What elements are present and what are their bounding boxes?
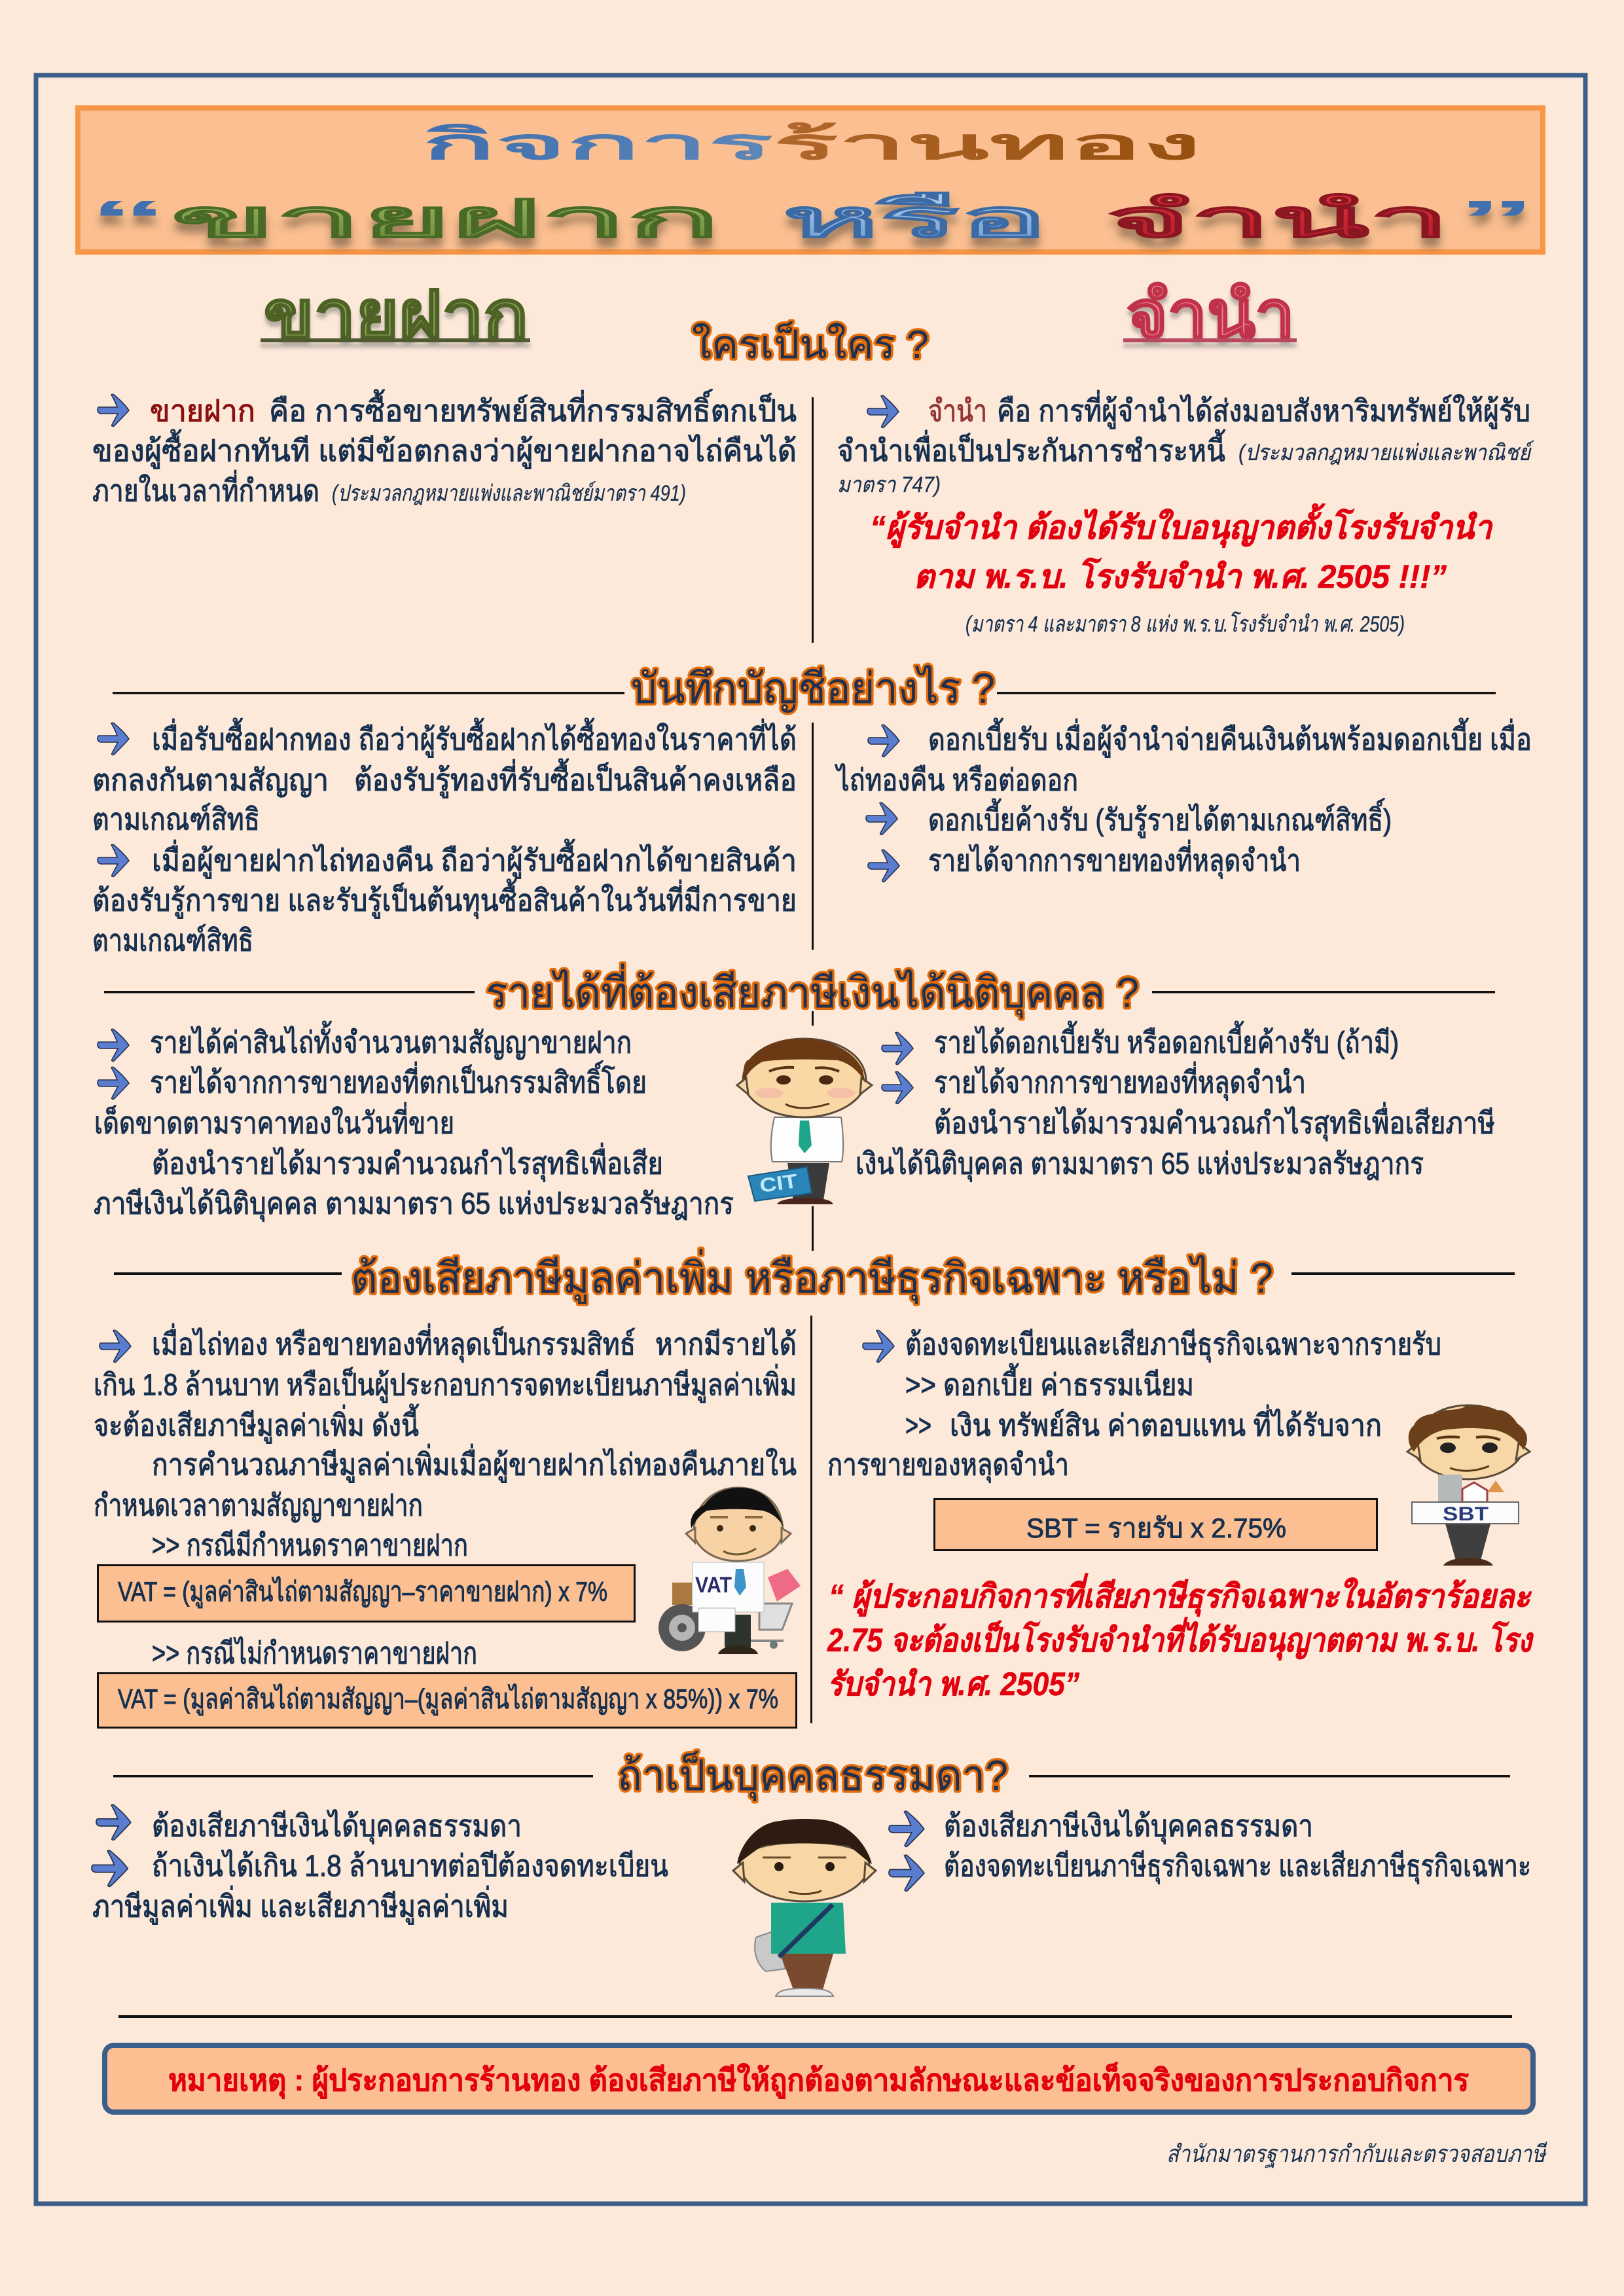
credit line: สำนักมาตรฐานการกำกับและตรวจสอบภาษี xyxy=(1166,2140,1547,2168)
definition text: (ประมวลกฎหมายแพ่งและพาณิชย์ xyxy=(1238,440,1534,465)
icon: CIT businessman xyxy=(737,1039,872,1204)
formula box: VAT with set price: VAT = (มูลค่าสินไถ่ตามสัญญา–ราคาขายฝาก) x 7% xyxy=(118,1576,607,1608)
VAT explanation text: หากมีรายได้ xyxy=(655,1327,797,1361)
taxable income text: ต้องนำรายได้มารวมคำนวณกำไรสุทธิเพื่อเสีย xyxy=(152,1143,663,1182)
icon: arrow xyxy=(882,1032,913,1064)
individual text: ภาษีมูลค่าเพิ่ม และเสียภาษีมูลค่าเพิ่ม xyxy=(92,1885,509,1924)
definition text xyxy=(92,389,797,508)
VAT explanation text: จะต้องเสียภาษีมูลค่าเพิ่ม ดังนี้ xyxy=(94,1403,419,1444)
icon: arrow xyxy=(868,725,899,757)
taxable income text: ภาษีเงินได้นิติบุคคล ตามมาตรา 65 แห่งประมวลรัษฎากร xyxy=(94,1186,734,1223)
VAT explanation text: เกิน 1.8 ล้านบาท หรือเป็นผู้ประกอบการจดทะเบียนภาษีมูลค่าเพิ่ม xyxy=(94,1364,797,1403)
icon: arrow xyxy=(96,1804,131,1840)
heading: จำนำ: จำนำ xyxy=(1127,278,1295,351)
panel: accounting for จำนำ xyxy=(835,717,1532,882)
panel: SBT xyxy=(827,1327,1534,1702)
icon: arrow xyxy=(866,802,897,834)
individual text: ต้องเสียภาษีเงินได้บุคคลธรรมดา xyxy=(152,1809,522,1844)
SBT explanation text: การขายของหลุดจำนำ xyxy=(827,1448,1069,1483)
accounting text: ดอกเบี้ยค้างรับ (รับรู้รายได้ตามเกณฑ์สิทธิ์) xyxy=(928,798,1392,838)
SBT explanation text: ต้องจดทะเบียนและเสียภาษีธุรกิจเฉพาะจากรายรับ xyxy=(905,1327,1441,1363)
SBT explanation text: >> ดอกเบี้ย ค่าธรรมเนียม xyxy=(905,1363,1194,1402)
section heading: VAT or SBT: ต้องเสียภาษีมูลค่าเพิ่ม หรือภาษีธุรกิจเฉพาะ หรือไม่ ? xyxy=(351,1249,1273,1304)
panel: accounting for ขายฝาก xyxy=(92,717,797,957)
definition text: ขายฝาก xyxy=(150,394,255,428)
panel: definition of จำนำ xyxy=(837,390,1534,637)
callout: SBT rate requirement xyxy=(827,1573,1534,1702)
formula box: VAT with set price xyxy=(98,1566,635,1622)
definition text: จำนำ xyxy=(928,394,987,428)
icon: arrow xyxy=(863,1330,894,1362)
individual text xyxy=(92,1809,668,1924)
accounting text: ไถ่ทองคืน หรือต่อดอก xyxy=(835,763,1078,797)
panel: individual ขายฝาก xyxy=(92,1804,668,1924)
accounting text: ต้องรับรู้การขาย และรับรู้เป็นต้นทุนซื้อสินค้าในวันที่มีการขาย xyxy=(92,878,797,919)
accounting text: เมื่อผู้ขายฝากไถ่ทองคืน ถือว่าผู้รับซื้อฝากได้ขายสินค้า xyxy=(152,839,797,878)
taxable income text xyxy=(856,1021,1495,1182)
icon: SBT businessman xyxy=(1407,1405,1530,1566)
SBT explanation text: เงิน ทรัพย์สิน ค่าตอบแทน ที่ได้รับจาก xyxy=(950,1405,1382,1443)
legal citation: (มาตรา 4 และมาตรา 8 แห่ง พ.ร.บ.โรงรับจำนำ พ.ศ. 2505) xyxy=(965,611,1405,637)
VAT explanation text xyxy=(94,1323,797,1562)
icon: arrow xyxy=(98,1029,129,1061)
accounting text: ตามเกณฑ์สิทธิ xyxy=(92,802,260,836)
title line 1: กิจการร้านทอง xyxy=(422,120,1201,168)
icon: VAT businessman xyxy=(659,1488,801,1654)
SBT explanation text: >> xyxy=(905,1408,931,1443)
icon: arrow xyxy=(98,844,129,876)
icon: arrow xyxy=(889,1855,924,1891)
accounting text: ตกลงกันตามสัญญา xyxy=(92,763,329,797)
individual text: ถ้าเงินได้เกิน 1.8 ล้านบาทต่อปีต้องจดทะเบียน xyxy=(152,1848,668,1882)
formula box: VAT without set price xyxy=(98,1673,796,1728)
callout: licence requirement xyxy=(870,503,1493,595)
definition text: คือ การซื้อขายทรัพย์สินที่กรรมสิทธิ์ตกเป็น xyxy=(269,389,797,428)
accounting text: ต้องรับรู้ทองที่รับซื้อเป็นสินค้าคงเหลือ xyxy=(354,758,797,798)
icon: arrow xyxy=(868,850,899,882)
definition text: (ประมวลกฎหมายแพ่งและพาณิชย์มาตรา 491) xyxy=(332,481,686,506)
callout: SBT rate requirement: 2.75 จะต้องเป็นโรงรับจำนำที่ได้รับอนุญาตตาม พ.ร.บ. โรง xyxy=(827,1617,1534,1660)
icon: arrow xyxy=(92,1850,128,1886)
taxable income text: เงินได้นิติบุคคล ตามมาตรา 65 แห่งประมวลรัษฎากร xyxy=(856,1147,1424,1182)
taxable income text: ต้องนำรายได้มารวมคำนวณกำไรสุทธิเพื่อเสียภาษี xyxy=(934,1102,1495,1141)
icon: arrow xyxy=(889,1811,924,1846)
case label: no set price: >> กรณีไม่กำหนดราคาขายฝาก xyxy=(152,1636,477,1670)
panel: definition of ขายฝาก xyxy=(92,389,797,508)
callout: SBT rate requirement: “ ผู้ประกอบกิจการที่เสียภาษีธุรกิจเฉพาะในอัตราร้อยละ xyxy=(829,1573,1532,1617)
sign label: SBT xyxy=(1443,1503,1489,1525)
title line 2: จำนำ xyxy=(1106,190,1450,248)
title line 2: ขายฝาก xyxy=(171,190,720,248)
title banner xyxy=(78,108,1543,252)
document label: VAT xyxy=(695,1573,732,1598)
definition text xyxy=(837,390,1534,497)
section heading: accounting: บันทึกบัญชีอย่างไร ? xyxy=(631,664,995,713)
callout: licence requirement: ตาม พ.ร.บ. โรงรับจำนำ พ.ศ. 2505 !!!” xyxy=(914,557,1447,595)
formula box: VAT without set price: VAT = (มูลค่าสินไถ่ตามสัญญา–(มูลค่าสินไถ่ตามสัญญา x 85%)) x 7% xyxy=(118,1683,778,1715)
icon: arrow xyxy=(867,395,899,427)
accounting text: รายได้จากการขายทองที่หลุดจำนำ xyxy=(928,839,1301,880)
icon: arrow xyxy=(98,394,129,426)
icon: individual person xyxy=(733,1819,876,1996)
taxable income text: เด็ดขาดตามราคาทองในวันที่ขาย xyxy=(94,1102,454,1140)
SBT explanation text xyxy=(827,1327,1441,1483)
panel: VAT xyxy=(94,1323,797,1728)
individual text xyxy=(944,1809,1531,1885)
accounting text: ดอกเบี้ยรับ เมื่อผู้จำนำจ่ายคืนเงินต้นพร้อมดอกเบี้ย เมื่อ xyxy=(928,717,1532,758)
note text: หมายเหตุ : ผู้ประกอบการร้านทอง ต้องเสียภาษีให้ถูกต้องตามลักษณะและข้อเท็จจริงของการประกอบกิจการ xyxy=(168,2062,1469,2099)
title line 2 xyxy=(89,190,1536,248)
title line 2: หรือ xyxy=(782,190,1048,248)
icon: arrow xyxy=(98,723,129,755)
definition text: ของผู้ซื้อฝากทันที แต่มีข้อตกลงว่าผู้ขายฝากอาจไถ่คืนได้ xyxy=(92,429,797,469)
definition text: จำนำเพื่อเป็นประกันการชำระหนี้ xyxy=(837,429,1225,467)
callout: SBT rate requirement: รับจำนำ พ.ศ. 2505” xyxy=(827,1666,1079,1702)
briefcase label: CIT xyxy=(758,1170,799,1197)
icon: arrow xyxy=(99,1330,131,1362)
definition text: มาตรา 747) xyxy=(837,473,941,497)
section heading: taxable income: รายได้ที่ต้องเสียภาษีเงินได้นิติบุคคล ? xyxy=(486,963,1139,1019)
panel: taxable income ขายฝาก xyxy=(94,1021,734,1223)
definition text: ภายในเวลาที่กำหนด xyxy=(92,470,319,508)
icon: arrow xyxy=(882,1071,913,1103)
accounting text: เมื่อรับซื้อฝากทอง ถือว่าผู้รับซื้อฝากได้ซื้อทองในราคาที่ได้ xyxy=(152,717,797,758)
VAT explanation text: การคำนวณภาษีมูลค่าเพิ่มเมื่อผู้ขายฝากไถ่ทองคืนภายใน xyxy=(152,1444,797,1483)
individual text: ต้องเสียภาษีเงินได้บุคคลธรรมดา xyxy=(944,1809,1313,1844)
section heading: individuals: ถ้าเป็นบุคคลธรรมดา? xyxy=(617,1751,1008,1802)
accounting text xyxy=(92,717,797,957)
accounting text: ตามเกณฑ์สิทธิ xyxy=(92,923,253,957)
title line 2: “ xyxy=(89,190,168,248)
accounting text xyxy=(835,717,1532,880)
taxable income text: รายได้ค่าสินไถ่ทั้งจำนวนตามสัญญาขายฝาก xyxy=(150,1021,632,1059)
taxable income text: รายได้ดอกเบี้ยรับ หรือดอกเบี้ยค้างรับ (ถ้ามี) xyxy=(934,1021,1399,1059)
taxable income text xyxy=(94,1021,734,1223)
panel: individual จำนำ xyxy=(889,1809,1531,1891)
definition text: คือ การที่ผู้จำนำได้ส่งมอบสังหาริมทรัพย์ให้ผู้รับ xyxy=(997,390,1530,429)
taxable income text: รายได้จากการขายทองที่หลุดจำนำ xyxy=(934,1062,1306,1101)
VAT explanation text: เมื่อไถ่ทอง หรือขายทองที่หลุดเป็นกรรมสิทธ์ xyxy=(152,1323,636,1363)
title line 2: ” xyxy=(1457,190,1536,248)
formula box: SBT: SBT = รายรับ x 2.75% xyxy=(1026,1513,1286,1543)
note box xyxy=(105,2045,1533,2112)
heading: ใครเป็นใคร: ใครเป็นใคร ? xyxy=(692,321,929,367)
taxable income text: รายได้จากการขายทองที่ตกเป็นกรรมสิทธิ์โดย xyxy=(150,1060,647,1100)
heading: ขายฝาก: ขายฝาก xyxy=(264,278,528,351)
VAT explanation text: กำหนดเวลาตามสัญญาขายฝาก xyxy=(94,1488,423,1522)
panel: taxable income จำนำ xyxy=(856,1021,1495,1182)
VAT explanation text: >> กรณีมีกำหนดราคาขายฝาก xyxy=(152,1528,468,1562)
callout: licence requirement: “ผู้รับจำนำ ต้องได้รับใบอนุญาตตั้งโรงรับจำนำ xyxy=(870,503,1493,548)
formula box: SBT xyxy=(935,1499,1377,1550)
icon: arrow xyxy=(98,1067,129,1099)
